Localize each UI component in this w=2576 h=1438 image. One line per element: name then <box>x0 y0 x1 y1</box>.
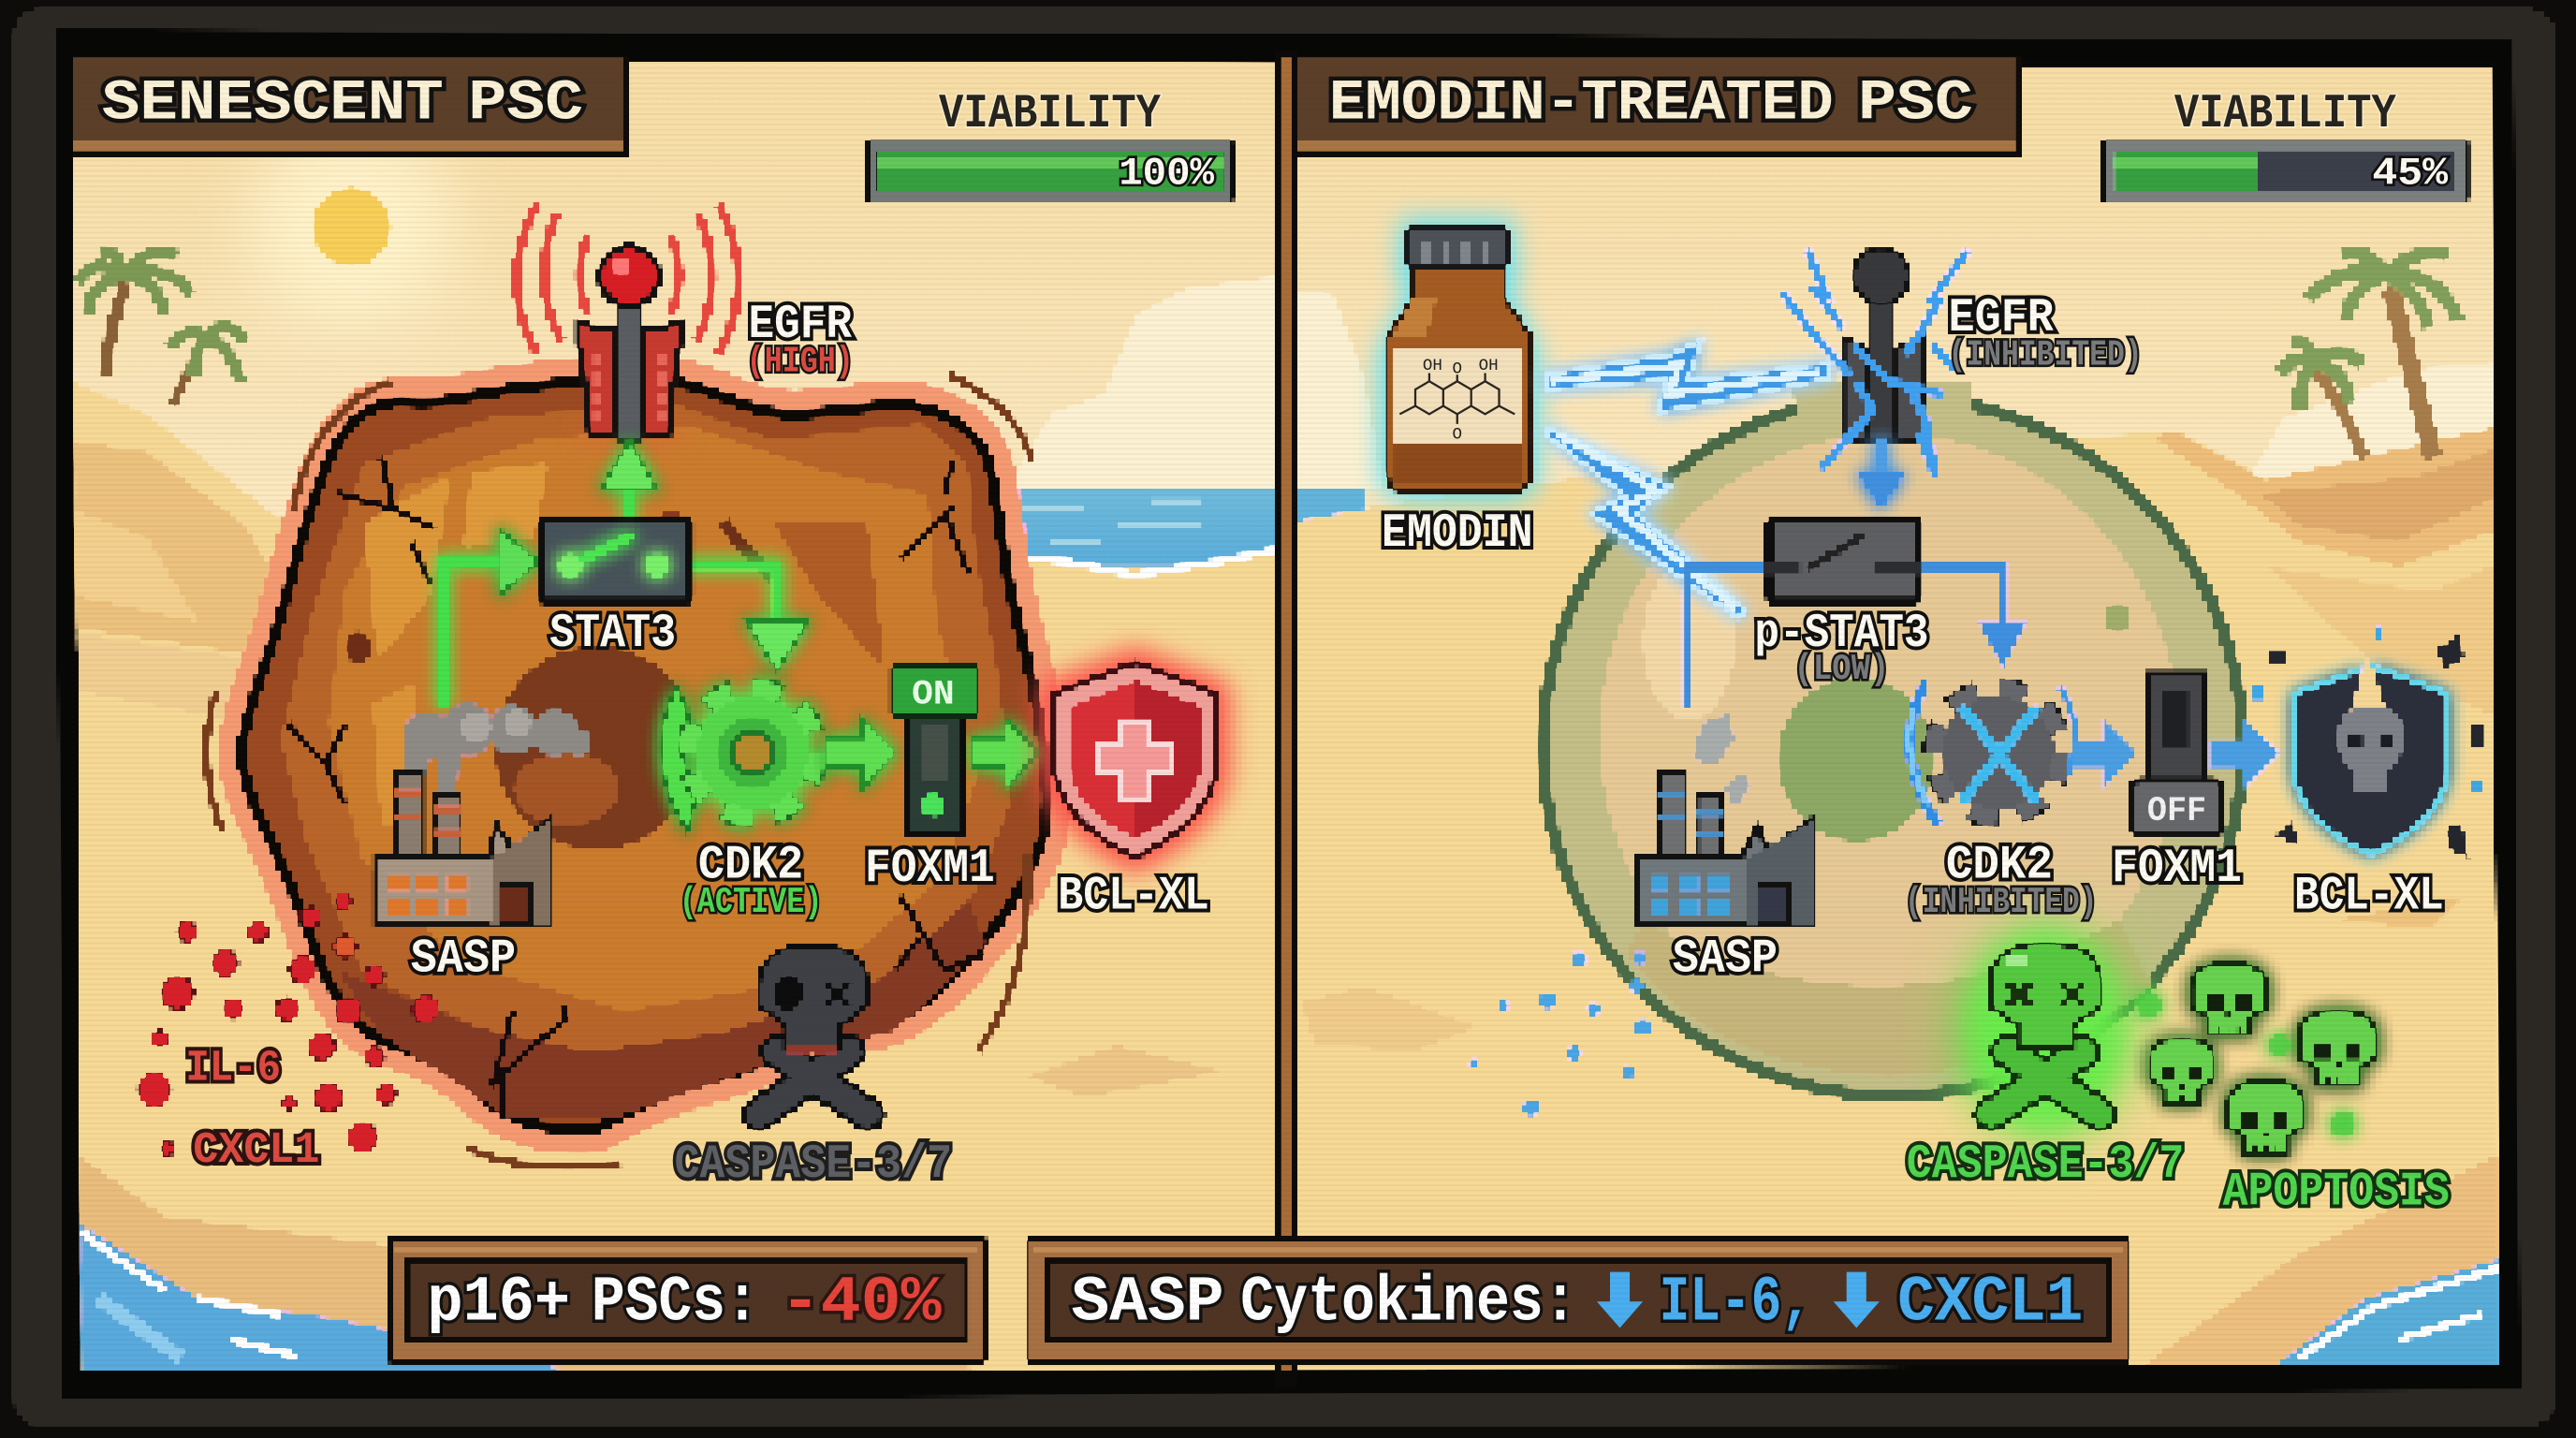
label: ON: ON <box>912 675 955 714</box>
viability bar: treated <box>2101 138 2469 204</box>
panel: treated cell <box>1536 381 2249 1103</box>
nucleus <box>494 646 698 850</box>
label: BCL-XL right: BCL-XL <box>2294 871 2444 924</box>
label: EGFR high: EGFR <box>748 299 852 352</box>
result text: cytokines: IL-6, <box>1660 1267 1812 1340</box>
label: CDK2 active <box>680 839 822 923</box>
result plate: cytokines <box>1025 1236 2130 1364</box>
value: 100 percent: 100% <box>1119 152 1215 197</box>
label: CDK2 active: CDK2 <box>698 839 803 892</box>
arrow: blue down to pSTAT3 <box>1856 440 1906 509</box>
label: CXCL1: CXCL1 <box>193 1126 319 1176</box>
icon: BCL-XL shield <box>1055 662 1216 858</box>
diagram: emodin molecule: O <box>1453 360 1462 378</box>
arrows: green to FOXM1 and BCL-XL <box>827 718 1038 789</box>
title: senescent PSC: SENESCENT <box>102 71 444 136</box>
result text: cytokines: Cytokines: <box>1240 1267 1577 1340</box>
label: viability left: VIABILITY <box>939 88 1161 141</box>
title: senescent PSC: PSC <box>468 71 583 136</box>
icon: FOXM1 switch on <box>892 666 977 835</box>
label: emodin: EMODIN <box>1382 507 1533 561</box>
value: 45 percent: 45% <box>2372 152 2449 197</box>
label: SASP right: SASP <box>1673 932 1778 986</box>
label: caspase inactive: CASPASE-3/7 <box>674 1138 952 1192</box>
cytokine particles: red <box>138 892 439 1155</box>
diagram: emodin molecule: O <box>1453 426 1462 445</box>
title: senescent PSC <box>102 71 583 136</box>
result text: p16 <box>427 1267 943 1340</box>
icon: down arrow CXCL1 <box>1834 1272 1880 1328</box>
label: CDK2 active: (ACTIVE) <box>680 882 822 923</box>
label: CDK2 inhibited: CDK2 <box>1946 839 2053 892</box>
icon: active caspase skull <box>1963 931 2128 1134</box>
result text: cytokines <box>1071 1267 2083 1340</box>
icon: CDK2 gear inhibited <box>1909 682 2075 825</box>
icon: CDK2 gear active <box>661 687 816 831</box>
icons: apoptosis skulls <box>2136 963 2377 1153</box>
label: IL-6: IL-6 <box>185 1044 281 1093</box>
label: BCL-XL left: BCL-XL <box>1058 871 1209 924</box>
title plate: senescent <box>74 56 631 156</box>
icon: STAT3 switch active <box>540 520 690 601</box>
label: viability right: VIABILITY <box>2174 88 2396 141</box>
label: EGFR inhibited: (INHIBITED) <box>1949 335 2143 376</box>
label: apoptosis: APOPTOSIS <box>2223 1167 2450 1220</box>
label: p-STAT3 low: (LOW) <box>1794 649 1889 690</box>
label: STAT3: STAT3 <box>549 608 676 661</box>
icon: SASP factory active <box>376 703 592 924</box>
icon: SASP factory reduced <box>1636 713 1814 924</box>
arrows: blue to FOXM1 and BCL-XL <box>2073 720 2280 789</box>
icon: FOXM1 switch off <box>2132 674 2221 835</box>
result text: p16: PSCs: <box>592 1267 759 1340</box>
title: emodin-treated PSC: PSC <box>1858 71 1973 136</box>
icon: inactive caspase skull <box>759 945 868 1114</box>
lightning bolts: emodin to targets <box>1546 340 1830 618</box>
result text: cytokines: SASP <box>1071 1267 1224 1340</box>
diagram: emodin molecule: OH <box>1479 357 1499 375</box>
label: EGFR inhibited: EGFR <box>1949 292 2054 345</box>
label: FOXM1 right: FOXM1 <box>2112 843 2242 896</box>
viability bar: senescent <box>866 138 1234 204</box>
label: EGFR high: (HIGH) <box>747 342 854 383</box>
icon: palm trees right <box>2280 253 2458 459</box>
result text: cytokines: CXCL1 <box>1897 1267 2083 1340</box>
result plate: p16 <box>388 1236 988 1364</box>
icon: EGFR receptor high <box>517 204 739 440</box>
label: SASP left: SASP <box>411 932 516 986</box>
panel background: senescent beach <box>72 59 1288 1390</box>
diagram: emodin molecule <box>1399 357 1515 445</box>
icon: palm trees left <box>77 251 246 406</box>
icon: emodin bottle <box>1386 225 1531 493</box>
label: FOXM1 left: FOXM1 <box>865 843 995 896</box>
result text: p16: p16+ <box>427 1267 570 1340</box>
label: caspase active: CASPASE-3/7 <box>1907 1138 2184 1192</box>
label: EGFR high <box>747 299 854 383</box>
label: p-STAT3 low: p-STAT3 <box>1754 608 1928 661</box>
label: p-STAT3 low <box>1754 608 1928 690</box>
diagram: emodin molecule: OH <box>1423 357 1442 375</box>
panel background: treated beach <box>1292 59 2507 1381</box>
label: EGFR inhibited <box>1949 292 2143 376</box>
stress motion marks <box>207 374 1032 1167</box>
result text: p16: -40% <box>781 1267 943 1340</box>
label: CDK2 inhibited <box>1905 839 2097 923</box>
label: OFF: OFF <box>2147 792 2206 831</box>
nucleus <box>1778 677 1936 842</box>
label: CDK2 inhibited: (INHIBITED) <box>1905 882 2097 923</box>
cracks <box>287 457 986 1121</box>
arrows: green signal up from STAT3 <box>444 440 809 707</box>
icon: sun <box>312 187 391 266</box>
icon: EGFR receptor inhibited <box>1782 248 1969 477</box>
panel: senescent cell <box>242 378 1046 1129</box>
cytokine particles: blue <box>1469 951 1651 1116</box>
shield debris <box>2254 626 2485 858</box>
divider <box>1277 50 1298 1388</box>
icon: down arrow IL-6 <box>1597 1272 1643 1328</box>
icon: broken BCL-XL shield <box>2293 657 2448 855</box>
title: emodin-treated PSC: EMODIN-TREATED <box>1329 71 1834 136</box>
icon: pSTAT3 switch low <box>1687 520 2027 707</box>
title plate: emodin <box>1298 56 2023 156</box>
